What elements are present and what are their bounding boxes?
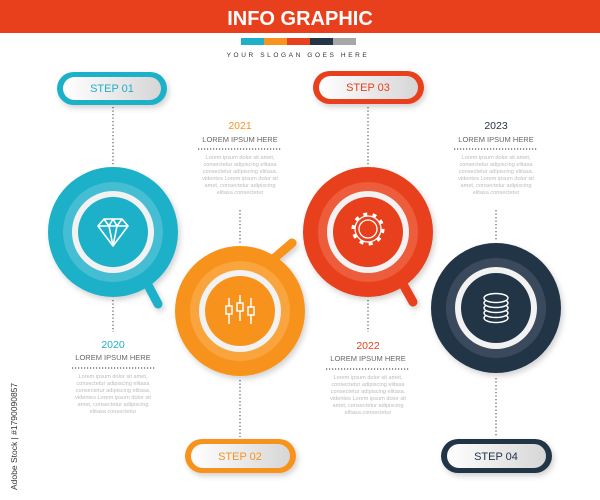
text block 2021: consectetur adipiscing elitasa	[203, 162, 277, 168]
text block 2022: consectetur adipiscing elitasa	[331, 382, 405, 388]
header bar	[0, 0, 600, 33]
text block 2023: consectetur adipiscing elitasa.	[459, 169, 534, 175]
circle 2 orange	[175, 243, 305, 376]
text block 2022: elitasa consectetur	[345, 410, 391, 416]
text block 2023: consectetur adipiscing elitasa	[459, 162, 533, 168]
text block 2021: videntes Lorem ipsum dolor sit	[202, 176, 278, 182]
text block 2020: LOREM IPSUM HERE	[75, 353, 151, 362]
step 03 pill	[313, 71, 424, 104]
watermark id: Adobe Stock | #1790090857	[9, 383, 19, 490]
text block 2020: Lorem ipsum dolor sit amet,	[78, 374, 148, 380]
text block 2023: 2023	[484, 120, 508, 132]
step 01 pill: STEP 01	[90, 83, 134, 95]
text block 2022: amet, consectetur adipiscing	[333, 403, 403, 409]
circle 3 red	[303, 167, 433, 302]
icon: sliders	[226, 295, 254, 324]
step 04 pill	[441, 439, 552, 473]
text block 2023: Lorem ipsum dolor sit amet,	[461, 155, 531, 161]
text block 2021: 2021	[228, 120, 252, 132]
text block 2020: consectetur adipiscing elitasa	[76, 381, 150, 387]
text block 2021: Lorem ipsum dolor sit amet,	[205, 155, 275, 161]
text block 2020: videntes Lorem ipsum dolor sit	[75, 395, 151, 401]
text block 2020: amet, consectetur adipiscing	[78, 402, 148, 408]
color strip	[241, 38, 356, 45]
text block 2022: videntes Lorem ipsum dolor sit	[330, 396, 406, 402]
dotted connectors	[113, 107, 496, 437]
text block 2023	[454, 120, 538, 196]
text block 2021: elitasa consectetur	[217, 190, 263, 196]
text block 2020	[72, 339, 156, 415]
title: INFO GRAPHIC	[227, 8, 373, 30]
step 04 pill: STEP 04	[474, 451, 518, 463]
text block 2022: consectetur adipiscing elitasa.	[331, 389, 406, 395]
text block 2023: LOREM IPSUM HERE	[458, 135, 534, 144]
text block 2023: videntes Lorem ipsum dolor sit	[458, 176, 534, 182]
step 01 pill	[57, 72, 167, 105]
text block 2023: elitasa consectetur	[473, 190, 519, 196]
text block 2022: Lorem ipsum dolor sit amet,	[333, 375, 403, 381]
icon: diamond	[98, 219, 128, 246]
step 03 pill: STEP 03	[346, 82, 390, 94]
text block 2021: LOREM IPSUM HERE	[202, 135, 278, 144]
circle 4 navy	[431, 243, 561, 373]
text block 2021	[198, 120, 282, 196]
step 02 pill	[185, 439, 296, 473]
text block 2022: 2022	[356, 340, 380, 352]
text block 2020: 2020	[101, 339, 125, 351]
step 02 pill: STEP 02	[218, 451, 262, 463]
slogan: YOUR SLOGAN GOES HERE	[227, 52, 369, 59]
text block 2022	[326, 340, 410, 416]
circle 1 teal	[48, 167, 178, 304]
icon: gear	[353, 214, 383, 244]
text block 2021: amet, consectetur adipiscing	[205, 183, 275, 189]
icon: coins	[484, 294, 508, 322]
text block 2022: LOREM IPSUM HERE	[330, 354, 406, 363]
text block 2021: consectetur adipiscing elitasa.	[203, 169, 278, 175]
text block 2023: amet, consectetur adipiscing	[461, 183, 531, 189]
text block 2020: consectetur adipiscing elitasa.	[76, 388, 151, 394]
text block 2020: elitasa consectetur	[90, 409, 136, 415]
